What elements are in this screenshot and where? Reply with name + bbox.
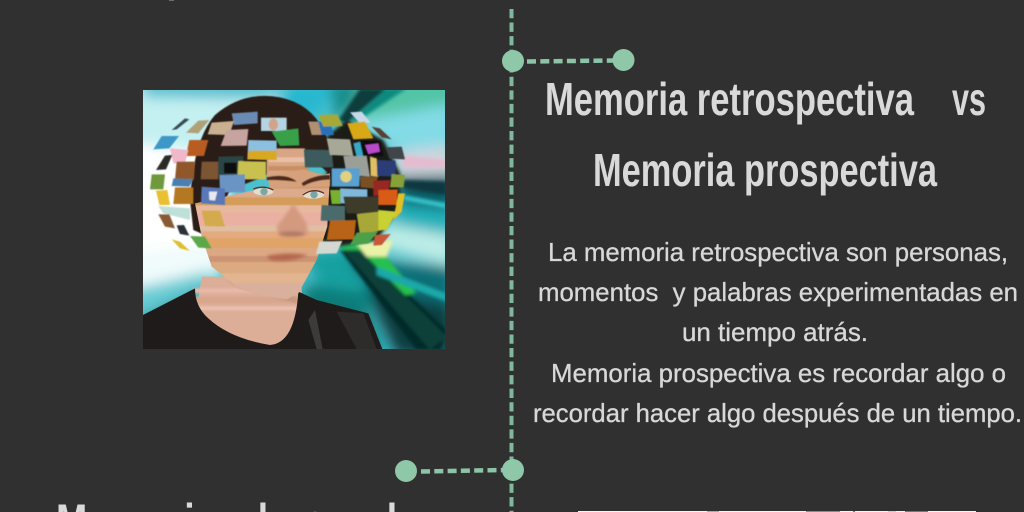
forehead bands <box>267 148 330 188</box>
top edge mark <box>169 0 174 1</box>
neck and shirt <box>143 277 382 349</box>
photo background: radial light streaks <box>143 90 445 349</box>
body text: recordar hacer algo después de un tiempo. <box>533 398 1022 428</box>
nose and mouth <box>267 203 308 261</box>
photo: man with floating images around his head <box>143 90 445 349</box>
title: retrospective vs prospective memory: Memoria retrospectiva <box>545 73 914 125</box>
title: retrospective vs prospective memory <box>545 73 986 196</box>
body text <box>533 237 1022 428</box>
timeline: vertical dashed line <box>510 9 514 512</box>
bottom image, top edge strip <box>578 511 976 512</box>
connector: lower node to bottom title <box>395 459 524 482</box>
floating picture tiles: left cluster <box>150 112 299 251</box>
body text: La memoria retrospectiva son personas, <box>548 237 1008 267</box>
body text: momentos y palabras experimentadas en <box>538 277 1018 307</box>
body text: Memoria prospectiva es recordar algo o <box>551 358 1006 388</box>
eyebrows and eyes <box>253 175 330 199</box>
hair <box>190 96 337 237</box>
photo background: sharp streak accents <box>338 88 447 350</box>
face with horizontal motion-blur bands <box>195 174 330 300</box>
title: retrospective vs prospective memory: vs <box>952 73 986 125</box>
floating picture tiles: right cluster <box>304 112 405 254</box>
dark mass behind right image cluster <box>320 120 400 247</box>
body text: un tiempo atrás. <box>682 317 868 347</box>
connector: upper node to title <box>502 49 634 72</box>
